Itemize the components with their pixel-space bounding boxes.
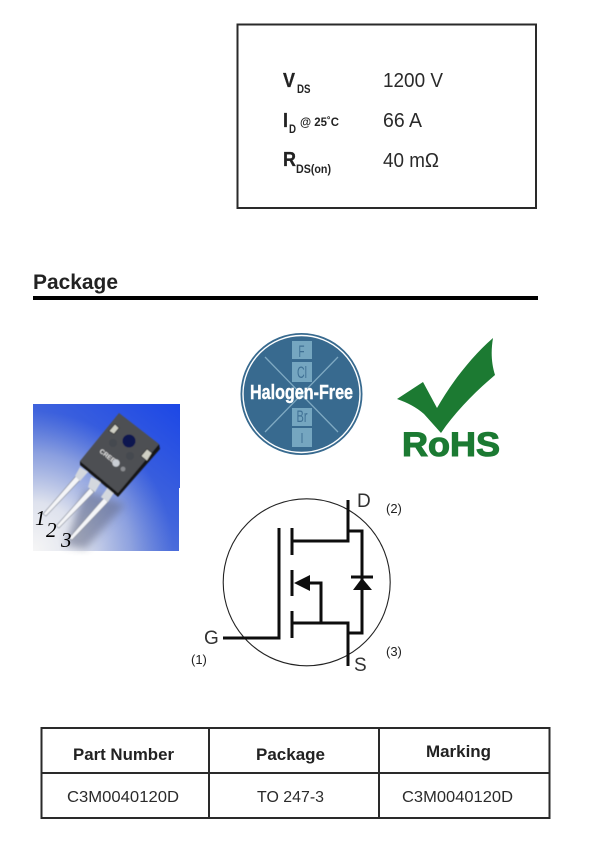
photo: TO-247-3 transistor: 3 bbox=[60, 528, 72, 552]
spec: VDS: DS bbox=[297, 84, 311, 96]
spec: VDS: V bbox=[283, 70, 296, 92]
spec: RDS(on): DS(on) bbox=[296, 164, 331, 176]
spec: ID at 25C bbox=[283, 110, 423, 136]
tabs bbox=[109, 424, 119, 434]
photo: TO-247-3 transistor bbox=[33, 404, 181, 552]
diode bbox=[351, 576, 373, 578]
spec: ID at 25C: 66 A bbox=[383, 110, 423, 132]
table row: TO 247-3 bbox=[257, 789, 324, 806]
package body bbox=[80, 461, 118, 497]
gate bbox=[223, 528, 279, 638]
circuit symbol: MOSFET: (1) bbox=[191, 652, 207, 667]
icon: Halogen-Free badge: Cl bbox=[297, 363, 307, 382]
spec: RDS(on) bbox=[283, 149, 439, 176]
spec: RDS(on): R bbox=[283, 149, 296, 171]
circuit symbol: MOSFET: S bbox=[354, 655, 367, 676]
spec: VDS bbox=[283, 70, 444, 96]
mounting hole bbox=[122, 434, 136, 448]
lead shadows bbox=[65, 490, 125, 549]
circuit symbol: MOSFET bbox=[191, 491, 402, 676]
table header: Marking bbox=[426, 742, 491, 761]
circuit symbol: MOSFET: (3) bbox=[386, 644, 402, 659]
body arrow bbox=[294, 575, 310, 591]
table header bbox=[73, 742, 491, 764]
heading: Package: Package bbox=[33, 271, 118, 294]
icon: Halogen-Free badge: Halogen-Free bbox=[250, 382, 353, 404]
icon: Halogen-Free badge bbox=[242, 334, 362, 454]
table: part information bbox=[41, 728, 550, 818]
table header: Package bbox=[256, 745, 325, 764]
photo: TO-247-3 transistor: 2 bbox=[46, 518, 57, 542]
drain and source bbox=[292, 500, 362, 666]
icon: RoHS check mark: RoHS bbox=[402, 426, 500, 464]
pin numbers: 1 bbox=[35, 506, 46, 530]
icon: RoHS check mark bbox=[397, 338, 500, 464]
table row bbox=[67, 789, 513, 806]
circuit symbol: MOSFET: (2) bbox=[386, 501, 402, 516]
spec: ID at 25C: D bbox=[289, 124, 296, 136]
spec: ID at 25C: I bbox=[283, 110, 288, 132]
table row: C3M0040120D bbox=[402, 789, 513, 806]
circuit symbol: MOSFET: G bbox=[204, 628, 219, 649]
marking: CREE bbox=[98, 448, 117, 465]
spec: RDS(on): 40 mΩ bbox=[383, 150, 439, 172]
spec: ID at 25C: @ 25˚C bbox=[300, 115, 339, 129]
icon: Halogen-Free badge: F bbox=[298, 342, 304, 361]
channel bbox=[290, 528, 294, 638]
table header: Part Number bbox=[73, 745, 174, 764]
icon: Halogen-Free badge: I bbox=[300, 430, 304, 447]
panel: key specifications bbox=[238, 24, 536, 208]
icon: Halogen-Free badge: Br bbox=[296, 407, 308, 426]
leads bbox=[43, 476, 80, 516]
table row: C3M0040120D bbox=[67, 789, 179, 806]
terminal labels: D bbox=[357, 491, 371, 512]
spec: VDS: 1200 V bbox=[383, 70, 444, 92]
